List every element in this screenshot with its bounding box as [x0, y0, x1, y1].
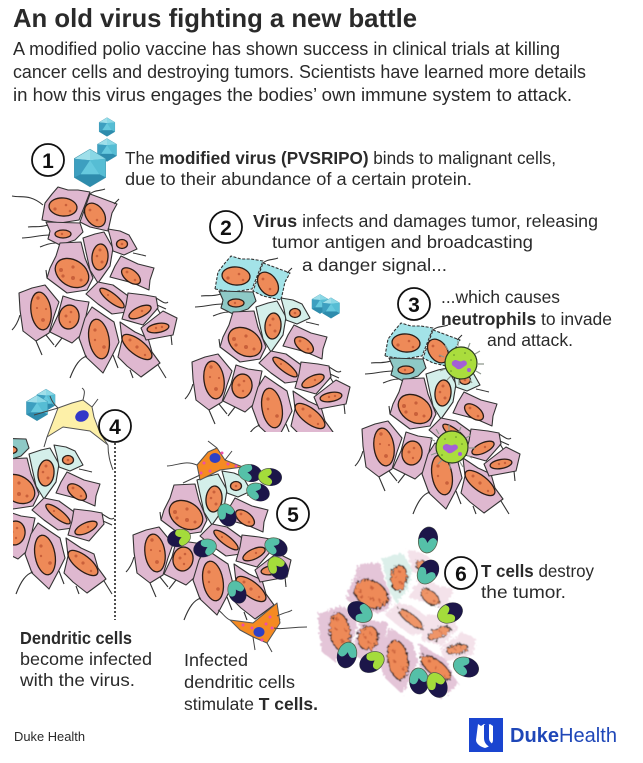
step 3 text: and attack. — [487, 330, 573, 350]
step 1 text: The modified virus (PVSRIPO) binds to malignant cells, — [125, 148, 556, 168]
dotted leader line — [114, 443, 116, 620]
step 6 number: 6 — [455, 563, 467, 586]
step 1 text — [125, 148, 556, 189]
intro text — [13, 39, 586, 105]
icon: neutrophils — [430, 341, 484, 469]
intro text: in how this virus engages the bodies’ own immune system to attack. — [13, 85, 572, 105]
step 4 text: with the virus. — [19, 670, 135, 690]
step 5 number — [277, 498, 309, 530]
step 4 cell cluster — [13, 438, 114, 594]
step 6 text — [481, 561, 594, 602]
step 5 text — [184, 650, 318, 714]
step 3 text: neutrophils to invade — [441, 309, 612, 329]
step 2 number — [210, 211, 242, 243]
step 1 cell cluster — [12, 187, 177, 378]
step 4 number: 4 — [109, 416, 121, 439]
step 1 number: 1 — [42, 150, 54, 173]
step 2 text: Virus infects and damages tumor, releasing — [253, 211, 598, 231]
step 6 text: the tumor. — [481, 582, 566, 602]
step 3 text: ...which causes — [441, 287, 560, 307]
step 4 text — [19, 628, 152, 690]
step 2 text: a danger signal... — [302, 255, 447, 275]
step 2 text: tumor antigen and broadcasting — [272, 232, 533, 252]
Duke Health logo: DukeHealth — [510, 724, 617, 747]
step 4 text: become infected — [20, 649, 152, 669]
step 2 cell cluster — [185, 256, 350, 447]
T cells attacking — [165, 463, 293, 606]
source credit: Duke Health — [14, 730, 85, 744]
step 2 text — [253, 211, 598, 275]
dendritic cell — [34, 388, 113, 470]
infected dendritic cells — [167, 441, 307, 652]
step 3 number: 3 — [408, 294, 420, 317]
step 2 number: 2 — [220, 217, 232, 240]
step 3 cell cluster — [355, 323, 520, 514]
step 5 cell cluster — [126, 471, 291, 620]
step 4 number — [99, 410, 131, 442]
step 3 number — [398, 288, 430, 320]
step 5 number: 5 — [287, 504, 299, 527]
title: An old virus fighting a new battle — [13, 3, 417, 33]
icon: viruses binding — [74, 118, 116, 187]
step 5 text: stimulate T cells. — [184, 694, 318, 714]
step 5 text: dendritic cells — [184, 672, 295, 692]
intro text: cancer cells and destroying tumors. Scientists have learned more details — [13, 62, 586, 82]
icon: released viruses — [312, 294, 340, 318]
step 6 number — [445, 557, 477, 589]
step 5 text: Infected — [184, 650, 248, 670]
intro text: A modified polio vaccine has shown success in clinical trials at killing — [13, 39, 560, 59]
icon: viruses near dendritic cell — [26, 389, 55, 421]
step 1 text: due to their abundance of a certain protein. — [125, 169, 472, 189]
Duke Health logo — [469, 718, 617, 752]
T cells around tumor — [334, 526, 481, 701]
step 4 text: Dendritic cells — [20, 628, 132, 648]
step 6 destroyed tumor — [311, 550, 476, 699]
step 6 text: T cells destroy — [481, 561, 594, 581]
step 1 number — [32, 144, 64, 176]
step 3 text — [441, 287, 612, 350]
